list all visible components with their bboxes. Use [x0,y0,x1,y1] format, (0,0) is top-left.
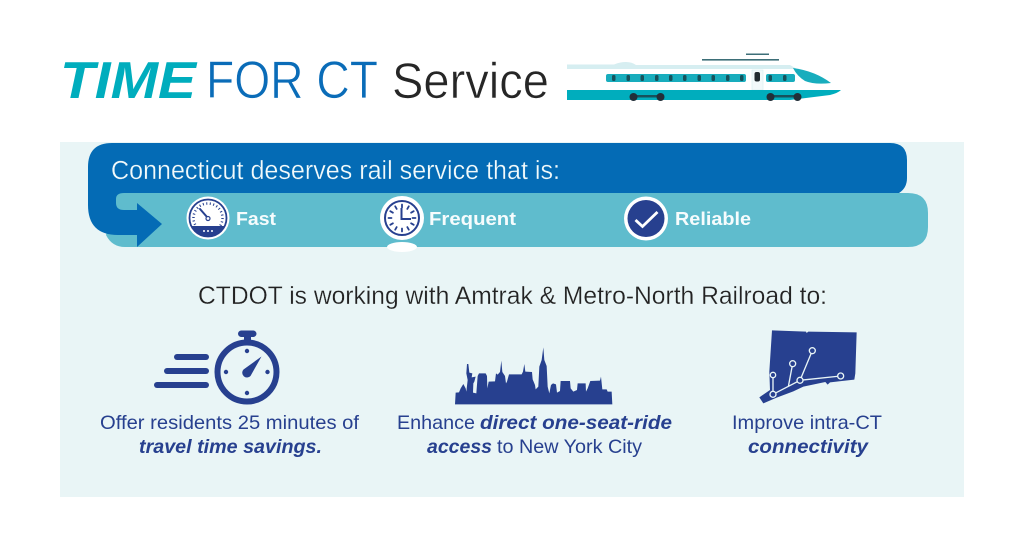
text: direct one-seat-ride access: to New York City [497,436,642,458]
icon: speedometer [186,196,230,240]
label: reliable: Reliable [675,209,751,229]
text: direct one-seat-ride access [397,412,672,458]
panel: background [60,142,964,497]
text: travel time savings: Offer residents 25 minutes of [100,412,360,434]
heading: rail service: Connecticut deserves rail service that is: [111,157,560,185]
label: fast: Fast [236,209,276,229]
text: travel time savings: travel time savings. [139,436,322,458]
panel: blue heading band with arrow [88,143,907,247]
icon: Connecticut map with rail lines [759,330,857,403]
title: Service [392,53,549,109]
text: direct one-seat-ride access: direct one-seat-ride [480,412,672,434]
text: intra-CT connectivity: Improve intra-CT [732,412,882,434]
title [60,51,549,110]
text: travel time savings [100,412,360,458]
decorative halo: frequent [387,242,417,252]
text: intra-CT connectivity: connectivity [748,436,869,458]
icon: checkmark [624,196,668,240]
subheading: CTDOT partners: CTDOT is working with Amtrak & Metro-North Railroad to: [198,282,827,310]
panel: teal qualities band [106,193,928,247]
title: TIME [60,52,197,110]
text: direct one-seat-ride access: access [427,436,492,458]
text: intra-CT connectivity [732,412,882,458]
text: direct one-seat-ride access: Enhance [397,412,475,434]
title: FOR CT [206,51,378,110]
icon: high-speed train [567,54,841,101]
icon: New York City skyline [455,347,612,404]
icon: clock [380,196,424,240]
icon: stopwatch with speed lines [154,330,276,402]
label: frequent: Frequent [429,209,516,229]
